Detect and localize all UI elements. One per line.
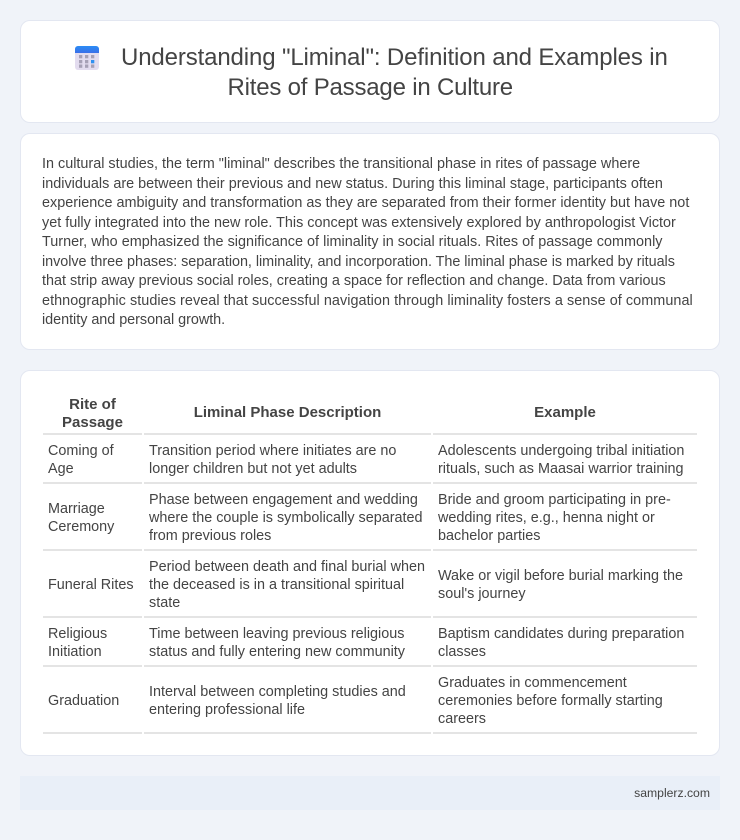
row: Coming of Age: Adolescents undergoing tribal initiation [438, 443, 684, 459]
text block: definition paragraph [42, 156, 693, 328]
row: Funeral Rites: Funeral Rites [48, 577, 134, 593]
panel: definition text [20, 133, 720, 350]
row: Coming of Age: Transition period where initiates are no [149, 443, 396, 459]
text block: definition paragraph: Turner, who emphasized the significance of liminality in social rituals. Rites of passage commonly [42, 234, 663, 250]
title [121, 44, 668, 101]
row: Marriage Ceremony: from previous roles [149, 528, 271, 544]
row: Marriage Ceremony: Bride and groom participating in pre- [438, 492, 671, 508]
text block: definition paragraph: experience ambiguity and transformation as they are separated from their former identity but have not [42, 195, 689, 211]
text block: definition paragraph: individuals are between their previous and new status. During this liminal stage, participants often [42, 176, 663, 192]
row: Marriage Ceremony: where the couple is symbolically separated [149, 510, 423, 526]
table header: Liminal Phase Description [194, 404, 381, 421]
row: Graduation: entering professional life [149, 702, 305, 718]
table header: Passage [62, 414, 123, 431]
row: Funeral Rites: state [149, 595, 180, 611]
row: Coming of Age: longer children but not yet adults [149, 461, 357, 477]
row: Graduation: ceremonies before formally starting [438, 693, 663, 709]
row: Coming of Age: Age [48, 461, 74, 477]
row: Funeral Rites: soul's journey [438, 586, 526, 602]
row: Funeral Rites [48, 559, 683, 611]
footer bar [20, 776, 720, 810]
row: Marriage Ceremony: Marriage [48, 501, 105, 517]
text block: definition paragraph: identity and personal growth. [42, 312, 225, 328]
table header: Rite of [69, 396, 116, 413]
row: Coming of Age [48, 443, 684, 477]
row: Funeral Rites: Period between death and final burial when [149, 559, 425, 575]
text block: definition paragraph: yet fully integrated into the new role. This concept was extensively explored by anthropologist Victor [42, 214, 676, 230]
title: Understanding "Liminal": Definition and Examples in [121, 44, 668, 71]
text block: definition paragraph: In cultural studies, the term "liminal" describes the transitional phase in rites of passage where [42, 156, 640, 172]
row: Religious Initiation [48, 626, 684, 660]
panel: table card [20, 370, 720, 756]
table: rites of passage [43, 396, 697, 734]
text block: definition paragraph: ethnographic studies reveal that successful navigation through liminality fosters a sense of communal [42, 292, 693, 308]
row: Religious Initiation: Initiation [48, 644, 102, 660]
row: Marriage Ceremony: wedding rites, e.g., henna night or [438, 510, 655, 526]
table header [62, 396, 596, 431]
text block: definition paragraph: that strip away previous social roles, creating a space for reflection and change. Data from various [42, 273, 666, 289]
row: Graduation: Graduates in commencement [438, 675, 627, 691]
row: Marriage Ceremony: Phase between engagement and wedding [149, 492, 418, 508]
panel: title card [20, 20, 720, 123]
row: Graduation [48, 675, 663, 727]
row: Religious Initiation: Time between leaving previous religious [149, 626, 404, 642]
row: Marriage Ceremony [48, 492, 671, 544]
row: Funeral Rites: the deceased is in a transitional spiritual [149, 577, 404, 593]
row: Religious Initiation: Religious [48, 626, 107, 642]
row: Marriage Ceremony: Ceremony [48, 519, 114, 535]
row: Coming of Age: rituals, such as Maasai warrior training [438, 461, 684, 477]
row: Marriage Ceremony: bachelor parties [438, 528, 540, 544]
row: Religious Initiation: Baptism candidates during preparation [438, 626, 684, 642]
table header: Example [534, 404, 596, 421]
row: Coming of Age: Coming of [48, 443, 114, 459]
row: Religious Initiation: classes [438, 644, 486, 660]
row: Graduation: Graduation [48, 693, 119, 709]
footer text: samplerz.com [634, 786, 710, 800]
icon: calendar [75, 46, 99, 70]
text block: definition paragraph: involve three phases: separation, liminality, and incorporation. The liminal phase is marked by rituals [42, 254, 675, 270]
row: Funeral Rites: Wake or vigil before burial marking the [438, 568, 683, 584]
row: Graduation: careers [438, 711, 486, 727]
row: Graduation: Interval between completing studies and [149, 684, 406, 700]
title: Rites of Passage in Culture [228, 74, 513, 101]
row: Religious Initiation: status and fully entering new community [149, 644, 405, 660]
